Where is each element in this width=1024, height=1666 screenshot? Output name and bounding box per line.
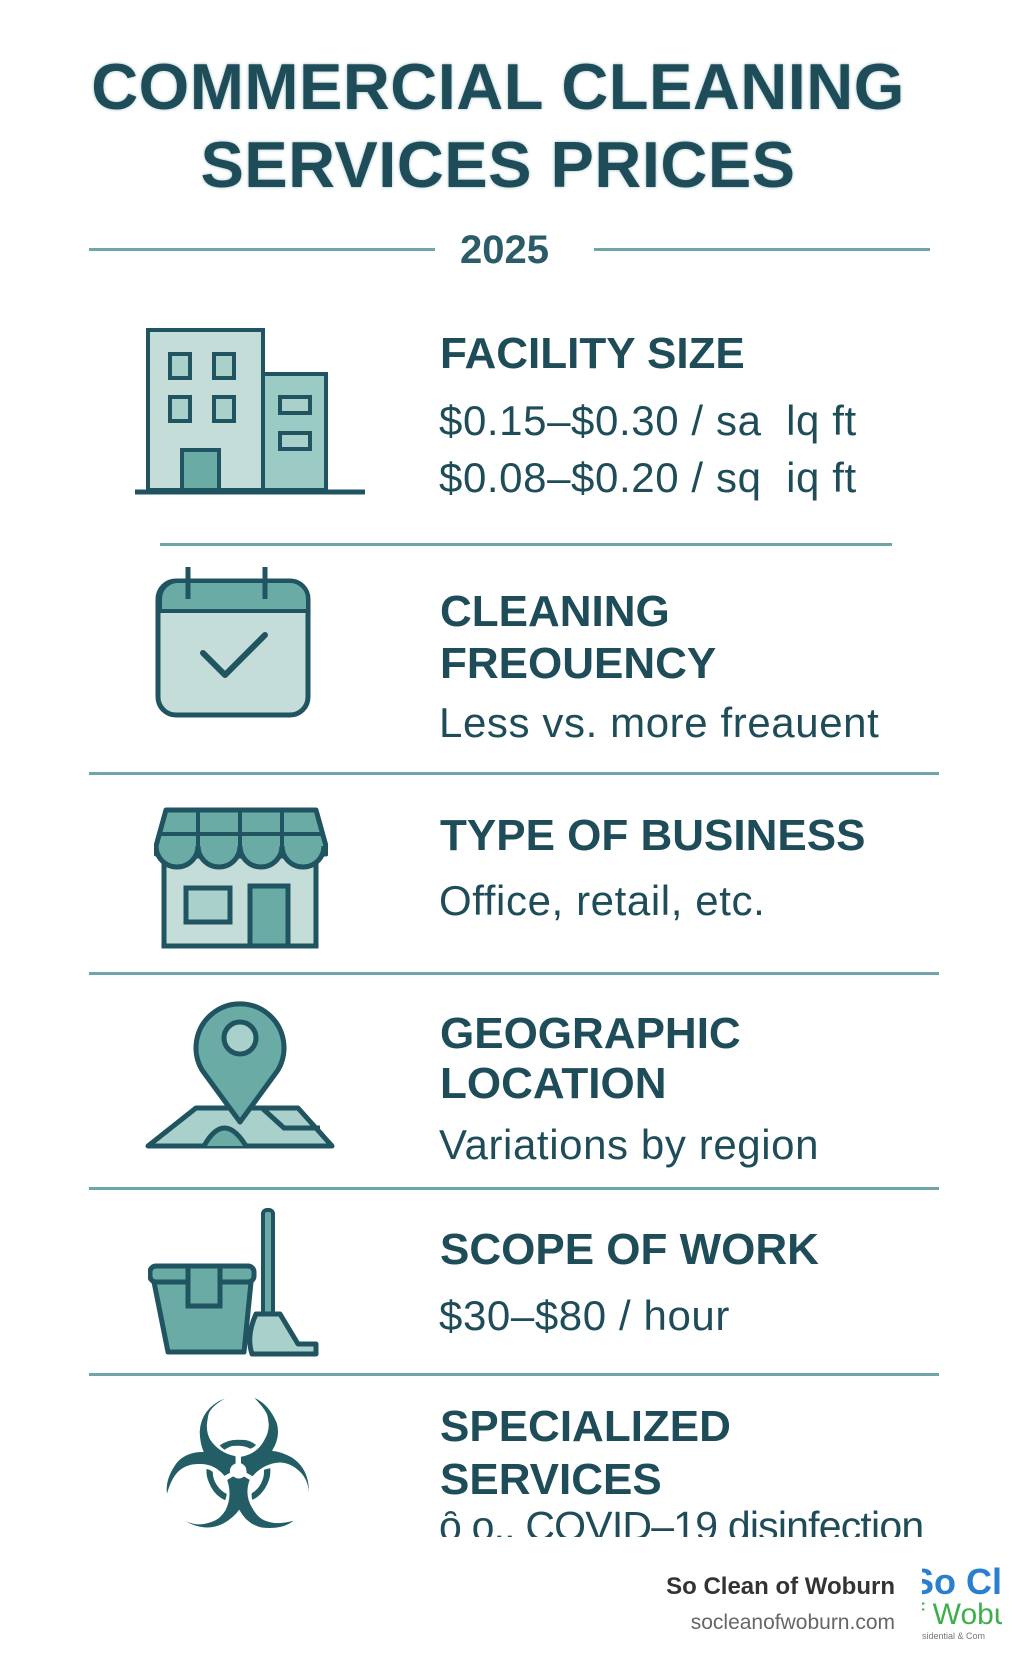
text: Office, retail, etc. [439,877,765,924]
row: business type: TYPE OF BUSINESS [440,811,865,860]
logo fragment: sidential & Com [922,1631,985,1641]
row: specialized: SERVICES [440,1455,662,1504]
icon: bucket and mop [148,1208,318,1356]
row: location: LOCATION [440,1059,666,1108]
row: specialized: SPECIALIZED [440,1402,731,1451]
row: specialized [440,1402,731,1504]
title: SERVICES PRICES [200,128,796,201]
title [91,50,905,201]
text: $30–$80 / hour [439,1292,730,1339]
row: cleaning frequency: FREOUENCY [440,639,716,688]
row: scope: SCOPE OF WORK [440,1225,819,1274]
row: location: GEOGRAPHIC [440,1009,741,1058]
icon: store [154,808,328,948]
footer brand: So Clean of Woburn [666,1573,895,1600]
row: location [440,1009,741,1108]
text: $0.15–$0.30 / sa lq ft [439,397,857,444]
icon: biohazard: ☣ [158,1363,318,1570]
year: 2025 [460,228,549,272]
icon: map pin [146,1001,334,1148]
text: Variations by region [439,1121,819,1168]
row: cleaning frequency [440,587,716,688]
row: cleaning frequency: CLEANING [440,587,670,636]
icon: building [135,328,365,494]
icon: calendar [156,567,310,718]
text: Less vs. more freauent [439,699,879,746]
text: $0.08–$0.20 / sq iq ft [439,454,857,501]
title: COMMERCIAL CLEANING [91,50,905,123]
logo fragment [922,1562,1002,1641]
row: facility size: FACILITY SIZE [440,329,745,378]
text: socleanofwoburn.com [691,1611,895,1634]
